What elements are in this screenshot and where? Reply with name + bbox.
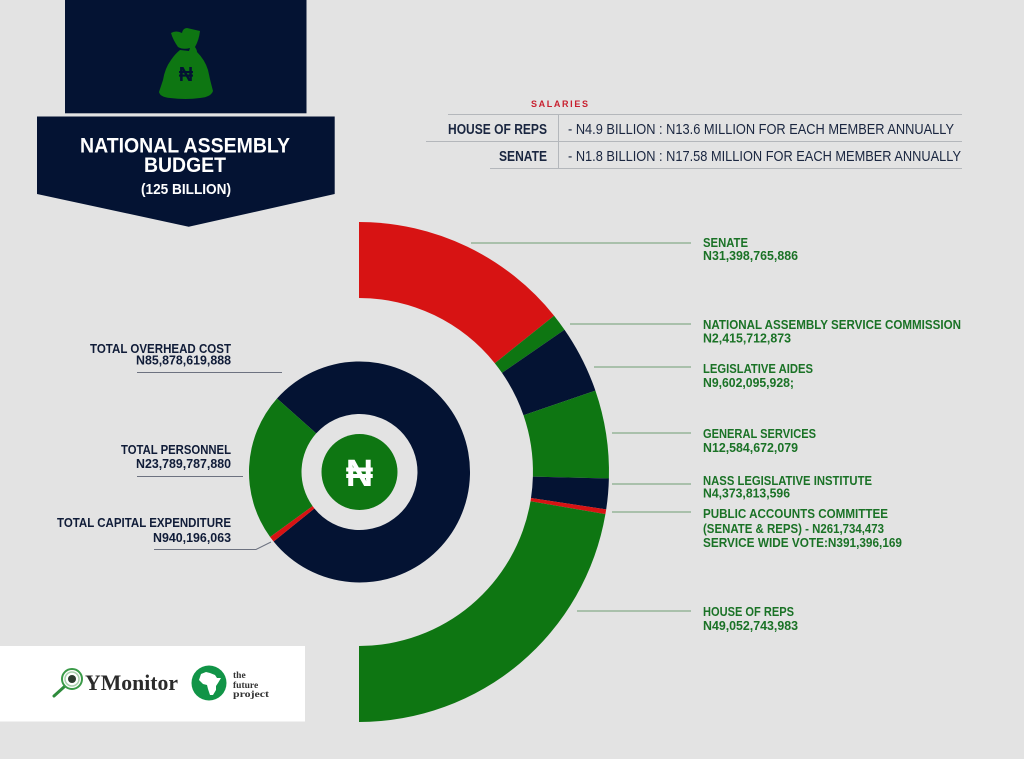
label: public accounts and service wide vote bbox=[612, 506, 902, 550]
label: total overhead cost bbox=[90, 341, 282, 372]
salaries heading: SALARIES bbox=[531, 99, 588, 109]
label: general services bbox=[612, 426, 816, 455]
label: legislative aides: N9,602,095,928; bbox=[703, 375, 794, 390]
label: public accounts and service wide vote: SERVICE WIDE VOTE:N391,396,169 bbox=[703, 535, 902, 550]
label: total overhead cost: TOTAL OVERHEAD COST bbox=[90, 341, 231, 356]
logo text: the future project: future bbox=[233, 681, 258, 691]
salaries table bbox=[426, 99, 962, 169]
label: senate: N31,398,765,886 bbox=[703, 248, 798, 263]
right labels bbox=[471, 235, 961, 633]
chart: outer half-ring breakdown bbox=[359, 222, 609, 722]
title text: NATIONAL ASSEMBLY bbox=[80, 134, 290, 158]
label: total personnel: N23,789,787,880 bbox=[136, 456, 231, 471]
logo text: YMonitor: YMonitor bbox=[85, 670, 178, 695]
label: legislative aides bbox=[594, 361, 813, 390]
budget total: (125 BILLION) bbox=[141, 182, 231, 198]
title banner bbox=[37, 116, 335, 227]
senate salary value: - N1.8 BILLION : N17.58 MILLION FOR EACH MEMBER ANNUALLY bbox=[568, 149, 961, 165]
icon: magnifier logo bbox=[54, 669, 82, 696]
icon: naira centre circle bbox=[322, 434, 398, 510]
label: nass legislative institute: NASS LEGISLATIVE INSTITUTE bbox=[703, 473, 872, 488]
logo text: the future project: project bbox=[233, 690, 270, 700]
label: house of reps: N49,052,743,983 bbox=[703, 618, 798, 633]
label: house of reps bbox=[577, 604, 798, 633]
icon: naira centre circle: ₦ bbox=[346, 453, 373, 495]
label: total capital expenditure: N940,196,063 bbox=[153, 530, 231, 545]
chart: inner donut bbox=[249, 362, 470, 583]
label: legislative aides: LEGISLATIVE AIDES bbox=[703, 361, 813, 376]
label: total personnel: TOTAL PERSONNEL bbox=[121, 442, 231, 457]
title text second line: BUDGET bbox=[144, 154, 226, 177]
header icon panel bbox=[65, 0, 306, 113]
label: house of reps: HOUSE OF REPS bbox=[703, 604, 794, 619]
label: senate bbox=[471, 235, 798, 263]
label: general services: N12,584,672,079 bbox=[703, 440, 798, 455]
house of reps salary value: - N4.9 BILLION : N13.6 MILLION FOR EACH MEMBER ANNUALLY bbox=[568, 122, 954, 138]
icon: money bag bbox=[159, 28, 213, 99]
senate salary label: SENATE bbox=[499, 149, 547, 165]
label: national assembly service commission bbox=[570, 317, 961, 346]
label: total overhead cost: N85,878,619,888 bbox=[136, 352, 231, 368]
label: nass legislative institute bbox=[612, 473, 872, 500]
logo text: the future project bbox=[233, 671, 270, 700]
house of reps salary label: HOUSE OF REPS bbox=[448, 122, 547, 138]
logo panel bbox=[0, 646, 305, 722]
label: public accounts and service wide vote: PUBLIC ACCOUNTS COMMITTEE bbox=[703, 506, 888, 521]
label: total personnel bbox=[121, 442, 243, 476]
label: public accounts and service wide vote: (SENATE & REPS) - N261,734,473 bbox=[703, 521, 884, 536]
icon: africa globe logo bbox=[192, 666, 226, 700]
left labels bbox=[57, 341, 282, 550]
label: total capital expenditure: TOTAL CAPITAL EXPENDITURE bbox=[57, 515, 231, 530]
label: general services: GENERAL SERVICES bbox=[703, 426, 816, 441]
icon: money bag: ₦ bbox=[179, 64, 194, 86]
label: national assembly service commission: N2,415,712,873 bbox=[703, 330, 791, 346]
label: senate: SENATE bbox=[703, 235, 748, 250]
label: national assembly service commission: NATIONAL ASSEMBLY SERVICE COMMISSION bbox=[703, 317, 961, 332]
label: total capital expenditure bbox=[57, 515, 271, 550]
label: nass legislative institute: N4,373,813,596 bbox=[703, 486, 790, 500]
logo text: the future project: the bbox=[233, 671, 246, 681]
